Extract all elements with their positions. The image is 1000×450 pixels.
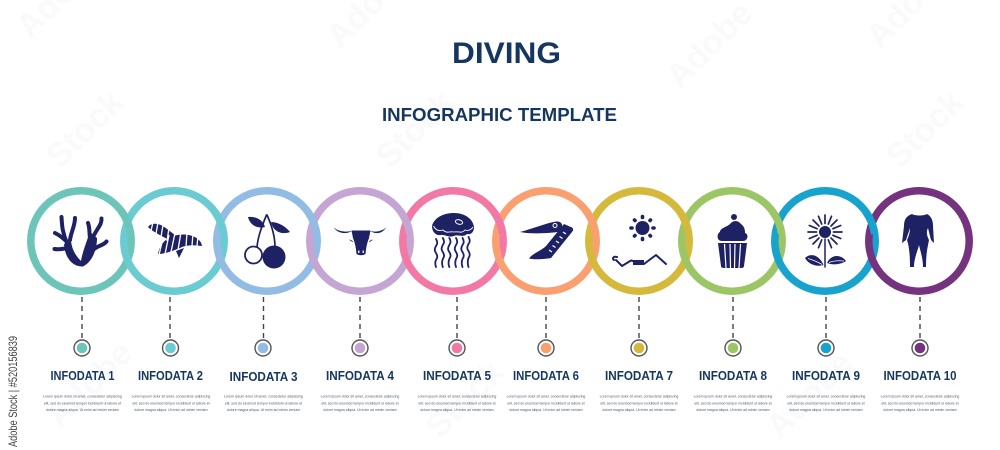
marker dot: [631, 340, 647, 356]
description: dolore magna aliqua. Ut enim ad minim veniam: [420, 408, 494, 412]
description: [507, 394, 585, 412]
title: DIVING: [452, 37, 561, 70]
icon: striped caterpillar shape: [148, 222, 202, 258]
description: Lorem ipsum dolor sit amet, consectetur adipiscing: [787, 394, 865, 398]
label: INFODATA 5: [423, 369, 491, 383]
description: [43, 394, 122, 412]
description: elit, sed do eiusmod tempor incididunt ut labore et: [418, 401, 496, 405]
marker dot: [912, 340, 928, 356]
description: Lorem ipsum dolor sit amet, consectetur adipiscing: [418, 394, 496, 398]
description: elit, sed do eiusmod tempor incididunt ut labore et: [132, 401, 210, 405]
text: Adobe: [39, 334, 140, 436]
label: INFODATA 6: [513, 369, 579, 383]
text: Adobe: [759, 344, 860, 446]
description: Lorem ipsum dolor sit amet, consectetur adipiscing: [43, 394, 122, 398]
marker dot: [538, 340, 554, 356]
description: [132, 394, 210, 412]
marker dot: [352, 340, 368, 356]
description: dolore magna aliqua. Ut enim ad minim veniam: [227, 408, 300, 412]
description: [881, 394, 959, 412]
description: dolore magna aliqua. Ut enim ad minim veniam: [789, 408, 863, 412]
panel: infodata 6: [496, 191, 596, 412]
panel: infodata 1: [31, 191, 131, 412]
marker dot: [818, 340, 834, 356]
description: elit, sed do eiusmod tempor incididunt ut labore et: [787, 401, 865, 405]
icon: wetsuit: [902, 214, 934, 267]
panel: infodata 3: [217, 191, 317, 412]
description: elit, sed do eiusmod tempor incididunt ut labore et: [881, 401, 959, 405]
panel: infodata 7: [589, 191, 689, 412]
description: Lorem ipsum dolor sit amet, consectetur adipiscing: [881, 394, 959, 398]
subtitle: INFOGRAPHIC TEMPLATE: [382, 105, 617, 125]
description: [600, 394, 678, 412]
icon: jellyfish: [432, 213, 474, 267]
icon: sunflower: [805, 215, 846, 267]
label: INFODATA 2: [138, 369, 203, 383]
description: dolore magna aliqua. Ut enim ad minim veniam: [134, 408, 208, 412]
text: Stock: [39, 83, 131, 176]
icon: cherries: [245, 215, 290, 268]
label: INFODATA 8: [699, 369, 767, 383]
panel: infodata 8: [682, 191, 782, 412]
description: dolore magna aliqua. Ut enim ad minim veniam: [323, 408, 397, 412]
description: [694, 394, 772, 412]
panel: infodata 4: [310, 191, 410, 412]
marker dot: [449, 340, 465, 356]
marker dot: [162, 340, 178, 356]
icon: sunbather: [613, 216, 666, 266]
label: INFODATA 10: [884, 369, 956, 383]
label: INFODATA 7: [605, 369, 673, 383]
description: [224, 394, 303, 412]
description: dolore magna aliqua. Ut enim ad minim veniam: [602, 408, 676, 412]
marker dot: [74, 340, 90, 356]
watermark id: Adobe Stock | #520156839: [6, 336, 20, 447]
description: elit, sed do eiusmod tempor incididunt ut labore et: [225, 401, 302, 405]
description: [321, 394, 399, 412]
description: elit, sed do eiusmod tempor incididunt ut labore et: [694, 401, 772, 405]
label: INFODATA 4: [326, 369, 394, 383]
description: [787, 394, 865, 412]
description: dolore magna aliqua. Ut enim ad minim veniam: [883, 408, 957, 412]
text: Stock: [419, 353, 511, 446]
description: Lorem ipsum dolor sit amet, consectetur adipiscing: [694, 394, 772, 398]
description: elit, sed do eiusmod tempor incididunt ut labore et: [44, 401, 121, 405]
description: dolore magna aliqua. Ut enim ad minim veniam: [509, 408, 583, 412]
panel: infodata 2: [124, 191, 224, 412]
label: INFODATA 1: [50, 369, 114, 383]
text: Stock: [879, 83, 971, 176]
icon: cupcake: [718, 214, 747, 268]
label: INFODATA 3: [230, 370, 298, 384]
icon: pocket knife: [520, 221, 573, 259]
panel: infodata 10: [869, 191, 969, 412]
panel: infodata 5: [403, 191, 503, 412]
description: Lorem ipsum dolor sit amet, consectetur adipiscing: [507, 394, 585, 398]
description: Lorem ipsum dolor sit amet, consectetur adipiscing: [321, 394, 399, 398]
marker dot: [255, 340, 271, 356]
description: Lorem ipsum dolor sit amet, consectetur adipiscing: [600, 394, 678, 398]
label: INFODATA 9: [792, 369, 860, 383]
description: [418, 394, 496, 412]
description: Lorem ipsum dolor sit amet, consectetur adipiscing: [132, 394, 210, 398]
description: elit, sed do eiusmod tempor incididunt ut labore et: [507, 401, 585, 405]
icon: bull head: [334, 227, 386, 255]
description: elit, sed do eiusmod tempor incididunt ut labore et: [600, 401, 678, 405]
icon: coral: [54, 217, 106, 266]
panel: infodata 9: [775, 191, 875, 412]
description: dolore magna aliqua. Ut enim ad minim veniam: [696, 408, 770, 412]
description: Lorem ipsum dolor sit amet, consectetur adipiscing: [224, 394, 303, 398]
description: dolore magna aliqua. Ut enim ad minim veniam: [46, 408, 119, 412]
text: Stock: [369, 83, 461, 176]
description: elit, sed do eiusmod tempor incididunt ut labore et: [321, 401, 399, 405]
marker dot: [725, 340, 741, 356]
